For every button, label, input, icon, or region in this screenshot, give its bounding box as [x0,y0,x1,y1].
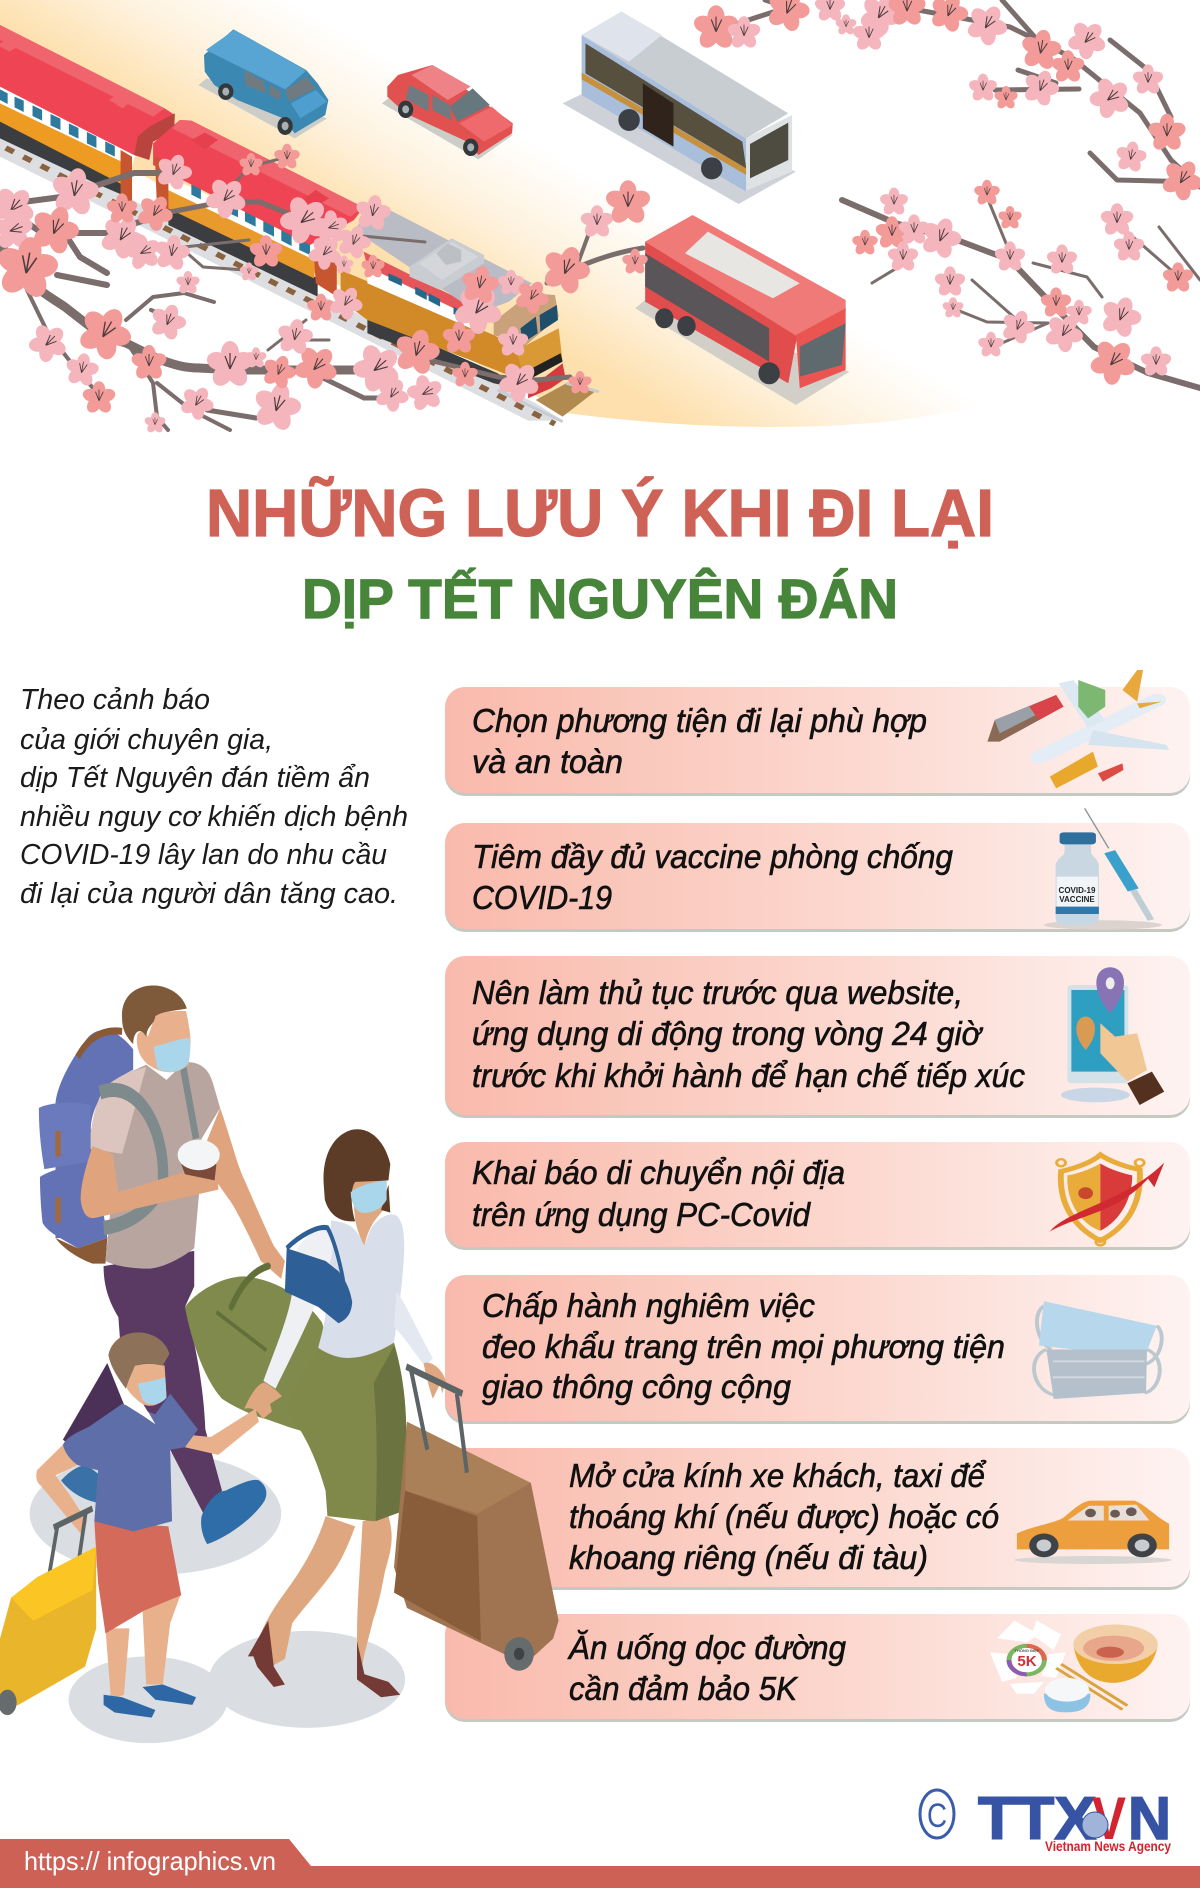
peach gradient backdrop [0,0,1100,427]
intro paragraph: của giới chuyên gia, [20,724,273,756]
panel: PC-Covid declaration: Khai báo di chuyển nội địa [472,1154,845,1191]
panel: choose transport: Chọn phương tiện đi lại phù hợp [472,702,927,739]
panel: ventilation: khoang riêng (nếu đi tàu) [569,1539,928,1576]
vehicle: red car [382,65,513,159]
panel: vaccination: COVID-19 [472,879,612,916]
icon: vaccine vial and syringe: COVID-19 [1059,886,1096,895]
panel: ventilation: Mở cửa kính xe khách, taxi để [569,1457,987,1494]
icon: vaccine vial and syringe [1044,808,1162,930]
intro paragraph [20,684,408,910]
vehicle: grey bus [562,12,796,204]
intro paragraph: COVID-19 lây lan do nhu cầu [20,839,387,871]
duffel bag [185,1266,325,1434]
panel: vaccination: Tiêm đầy đủ vaccine phòng chống [472,838,954,875]
second carriage [168,207,318,297]
icon: surgical masks [1034,1301,1162,1399]
panel: online check-in [445,956,1190,1118]
backpack [39,1030,133,1264]
header illustration [0,0,1200,437]
illustration: family travelling with luggage [0,985,559,1743]
panel: online check-in: ứng dụng di động trong vòng 24 giờ [472,1015,984,1052]
cherry blossom flowers [0,0,1200,437]
website url: https:// infographics.vn [24,1846,276,1876]
blossom branches [0,0,1200,430]
icon: phone with location pin [1061,967,1164,1105]
icon: 5K message and soup bowl: THÔNG ĐIỆP [1015,1648,1040,1653]
icon: shield and virus [1050,1155,1164,1245]
track bed [0,133,563,421]
panel: PC-Covid declaration [445,1142,1190,1250]
panel: ventilation [445,1448,1190,1590]
train [0,25,599,424]
icon: 5K message and soup bowl [990,1621,1158,1712]
man [61,985,285,1544]
ground shadows [30,1452,405,1743]
locomotive [367,317,524,390]
panel: face masks: đeo khẩu trang trên mọi phương tiện [482,1328,1005,1365]
panel: choose transport [445,670,1190,796]
copyright mark: C [927,1797,947,1835]
title: NHỮNG LƯU Ý KHI ĐI LẠI [206,476,994,551]
panel: PC-Covid declaration: trên ứng dụng PC-Covid [472,1196,812,1233]
icon: orange car [1014,1501,1172,1564]
icon: plane, train, bus and car [987,670,1169,788]
panel: safe eating: Ăn uống dọc đường [567,1629,847,1666]
panel: online check-in: Nên làm thủ tục trước qua website, [472,974,963,1011]
logo: TTXVN: V [1092,1785,1126,1852]
panel: vaccination [445,808,1190,932]
panel: online check-in: trước khi khởi hành để hạn chế tiếp xúc [472,1057,1025,1094]
logo: TTXVN: Vietnam News Agency [1045,1838,1171,1854]
boy [36,1332,259,1718]
copyright mark [920,1790,954,1838]
intro paragraph: dịp Tết Nguyên đán tiềm ẩn [20,762,370,794]
panel: face masks [445,1275,1190,1424]
logo: TTXVN: TTX [978,1785,1096,1852]
footer band [0,1839,1200,1888]
yellow suitcase [0,1508,96,1715]
logo: TTXVN [920,1785,1171,1854]
brown suitcase [394,1367,559,1671]
rear carriage [0,120,126,197]
panel: ventilation: thoáng khí (nếu được) hoặc có [569,1498,999,1535]
vehicle: red bus [635,215,849,405]
woman [244,1129,446,1697]
footer tab [0,1839,311,1866]
subtitle: DỊP TẾT NGUYÊN ĐÁN [302,567,898,630]
intro paragraph: đi lại của người dân tăng cao. [20,878,398,910]
intro paragraph: Theo cảnh báo [20,684,210,716]
intro paragraph: nhiều nguy cơ khiến dịch bệnh [20,801,408,833]
panel: safe eating [445,1614,1190,1722]
panel: safe eating: cần đảm bảo 5K [569,1670,799,1707]
vehicle: blue van [198,29,328,138]
panel: choose transport: và an toàn [472,743,623,780]
icon: 5K message and soup bowl: 5K [1017,1653,1037,1670]
logo: TTXVN: N [1128,1785,1171,1852]
panel: face masks: giao thông công cộng [482,1368,792,1405]
panel: face masks: Chấp hành nghiêm việc [482,1287,815,1324]
icon: vaccine vial and syringe: VACCINE [1059,895,1095,904]
